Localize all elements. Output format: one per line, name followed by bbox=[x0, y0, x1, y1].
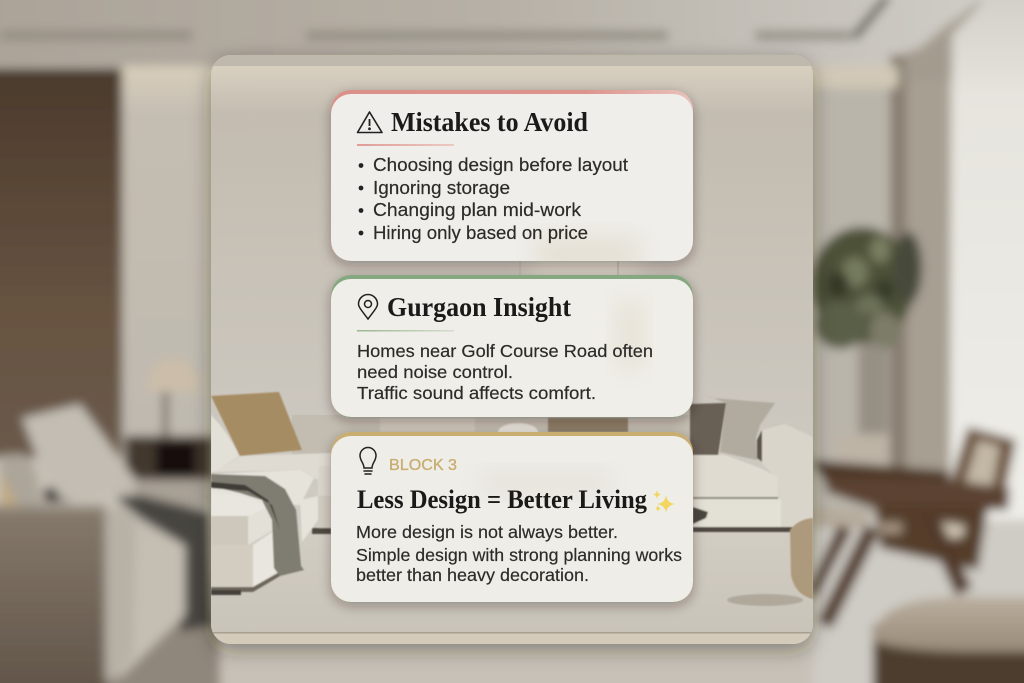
back wall bbox=[120, 66, 910, 546]
bullet list: Choosing design before layout bbox=[373, 155, 628, 175]
left sectional sofa bbox=[211, 392, 331, 595]
heading: Mistakes to Avoid: Mistakes to Avoid bbox=[391, 107, 588, 137]
wooden floor strip bbox=[211, 632, 813, 644]
ceiling recessed strips bbox=[0, 0, 891, 40]
body paragraph: Simple design with strong planning works bbox=[356, 545, 682, 565]
bullet list: Changing plan mid-work bbox=[373, 200, 582, 220]
left sofa seat bbox=[118, 522, 185, 680]
sofa back wall band bbox=[292, 415, 690, 454]
insight paragraph: need noise control. bbox=[357, 362, 513, 382]
low sofa backrest bbox=[135, 481, 215, 507]
bullet list: Ignoring storage bbox=[373, 178, 510, 198]
beige ottoman bbox=[790, 518, 813, 599]
heading rule bbox=[357, 330, 454, 332]
bullet list: Hiring only based on price bbox=[373, 223, 588, 243]
central sharp room panel bbox=[211, 55, 813, 644]
dark throw bbox=[115, 495, 215, 632]
card 2 background bbox=[331, 275, 693, 417]
card: Gurgaon Insight bbox=[331, 275, 693, 417]
insight paragraph bbox=[357, 341, 653, 403]
body paragraph: More design is not always better. bbox=[356, 522, 618, 542]
icon: sparkles bbox=[653, 490, 675, 513]
card: Less Design = Better Living bbox=[331, 432, 693, 602]
blurred wall art bbox=[532, 261, 638, 275]
rug bbox=[211, 586, 813, 632]
small left cushion bbox=[0, 454, 42, 508]
panel ceiling strip bbox=[211, 55, 813, 66]
icon: warning triangle bbox=[358, 112, 382, 132]
ceiling bbox=[0, 0, 1000, 66]
floor right bbox=[813, 520, 1024, 683]
rug shadow bbox=[727, 594, 803, 606]
bright curtain bbox=[950, 0, 1024, 560]
grey throw blanket bbox=[211, 474, 304, 576]
insight paragraph: Traffic sound affects comfort. bbox=[357, 383, 596, 403]
heading: Gurgaon Insight: Gurgaon Insight bbox=[387, 292, 571, 322]
left sofa arm front bbox=[0, 508, 107, 683]
wood slat wall panel bbox=[0, 68, 122, 458]
heading: Less Design = Better Living: Less Design = Better Living bbox=[357, 485, 647, 514]
gap objects behind cards bbox=[380, 418, 629, 432]
left sofa cushion bbox=[22, 404, 137, 500]
icon: light bulb bbox=[360, 448, 376, 474]
icon: location pin bbox=[358, 294, 378, 319]
insight paragraph: Homes near Golf Course Road often bbox=[357, 341, 653, 361]
bullet list bbox=[359, 155, 628, 243]
right wall and curtains bbox=[813, 66, 893, 516]
heading rule bbox=[357, 144, 454, 146]
body paragraph: better than heavy decoration. bbox=[356, 565, 589, 585]
table lamp bbox=[146, 358, 203, 438]
side table bbox=[125, 436, 215, 480]
body paragraph bbox=[356, 522, 682, 585]
label: BLOCK 3: BLOCK 3 bbox=[389, 457, 457, 474]
round ottoman bbox=[873, 597, 1024, 683]
console object bbox=[834, 434, 890, 468]
card 1 background bbox=[331, 90, 693, 261]
right sofa bbox=[690, 394, 813, 599]
card 3 background bbox=[331, 432, 693, 602]
card: Mistakes to Avoid bbox=[331, 90, 693, 275]
floor left bbox=[0, 620, 220, 683]
wooden lounge chair bbox=[808, 427, 1016, 628]
plant bbox=[810, 227, 922, 349]
